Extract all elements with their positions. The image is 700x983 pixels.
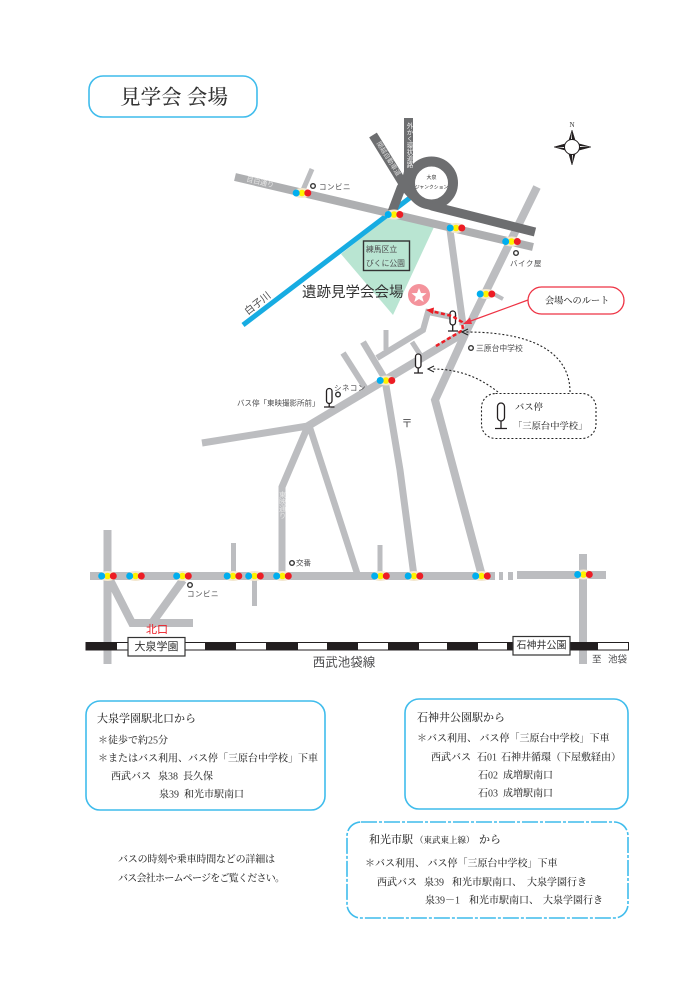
callout: route to venue: [463, 287, 624, 324]
panel: from Oizumi-gakuen station: ＊またはバス利用、バス停「三原台中学校」下車: [98, 752, 318, 764]
compass: N: [569, 121, 575, 129]
park label: びくに公園: [366, 259, 405, 268]
direction label: 池袋: [608, 654, 628, 666]
panel: from Oizumi-gakuen station: ＊徒歩で約25分: [98, 734, 168, 746]
map: river: 白子川: [242, 289, 273, 318]
railway line: [86, 642, 628, 650]
bus stops on map: [324, 311, 458, 407]
panel: from Shakujii-koen station: 石神井公園駅から: [417, 710, 505, 724]
direction label: [592, 654, 628, 666]
walking route: [426, 308, 463, 346]
panel: from Wakoshi station: ＊バス利用、 バス停「三原台中学校」下車: [365, 856, 558, 870]
landmarks: コンビニ: [319, 182, 351, 192]
panel: from Shakujii-koen station: 成増駅南口: [503, 786, 553, 800]
station: Shakujii-koen: [513, 636, 570, 655]
panel: from Wakoshi station: （東武東上線）: [415, 835, 475, 845]
note: bus schedule: [118, 852, 285, 884]
station: Shakujii-koen: 石神井公園: [516, 638, 566, 652]
railway line name: 西武池袋線: [313, 654, 376, 670]
panel: from Oizumi-gakuen station: 和光市駅南口: [184, 788, 244, 800]
panel: from Wakoshi station: 泉39－1: [425, 894, 460, 906]
panel: from Oizumi-gakuen station: 泉39: [159, 788, 179, 800]
note: bus schedule: バス会社ホームページをご覧ください。: [118, 872, 285, 884]
panel: from Oizumi-gakuen station: 泉38: [158, 770, 178, 782]
road label: Toei street: 東映通り: [278, 490, 286, 519]
landmarks: バス停「東映撮影所前」: [237, 398, 320, 408]
station: Oizumi-gakuen: 大泉学園: [134, 639, 178, 653]
landmarks: 三原台中学校: [476, 343, 523, 353]
bus stop legend: 「三原台中学校」: [513, 420, 587, 432]
park label: 練馬区立: [366, 244, 397, 254]
landmarks: 〒: [402, 418, 412, 430]
callout: route to venue: 会場へのルート: [545, 294, 609, 306]
panel: from Shakujii-koen station: 石03: [478, 788, 498, 800]
panel: from Wakoshi station: 泉39: [424, 876, 444, 888]
landmarks: シネコン: [334, 384, 366, 392]
landmarks: [187, 182, 542, 598]
panel: from Wakoshi station: から: [479, 833, 501, 846]
panel: from Shakujii-koen station: 石01: [477, 752, 497, 764]
panel: from Wakoshi station: 大泉学園行き: [543, 894, 603, 906]
compass: [554, 121, 591, 165]
panel: from Wakoshi station: 大泉学園行き: [527, 876, 587, 888]
panel: from Oizumi-gakuen station: 大泉学園駅北口から: [97, 711, 196, 725]
map: expressways and junction: [373, 118, 535, 232]
vertical road crossing rail: [108, 651, 583, 664]
bus stop legend: バス停: [515, 401, 544, 413]
panel: from Oizumi-gakuen station: 西武バス: [111, 770, 151, 782]
map: expressways and junction: 関越自動車道: [375, 140, 403, 178]
dotted arrows from bus stop legend: [428, 329, 570, 392]
panel: from Oizumi-gakuen station: 長久保: [183, 770, 213, 782]
panel: from Wakoshi station: 西武バス: [377, 876, 417, 888]
map: expressways and junction: ジャンクション: [415, 184, 448, 190]
landmarks: コンビニ: [187, 590, 219, 598]
venue label with star marker: 遺跡見学会会場: [302, 284, 404, 301]
map: expressways and junction: 大泉: [426, 174, 437, 181]
title: [89, 76, 257, 117]
traffic lights: [98, 188, 593, 581]
panel: from Shakujii-koen station: ＊バス利用、 バス停「三原台中学校」下車: [417, 732, 610, 744]
panel: from Wakoshi station: [347, 822, 628, 918]
panel: from Shakujii-koen station: 石02: [478, 770, 498, 782]
map: Mejiro street: 目白通り: [246, 174, 275, 190]
landmarks: バイク屋: [510, 259, 542, 268]
venue label with star marker: [302, 284, 430, 306]
panel: from Wakoshi station: 和光市駅南口、: [452, 876, 522, 888]
note: bus schedule: バスの時刻や乗車時間などの詳細は: [118, 852, 275, 866]
panel: from Oizumi-gakuen station: [86, 701, 325, 810]
direction label: 至: [592, 654, 602, 666]
park label: [364, 241, 410, 270]
map: river: [242, 197, 411, 325]
station: Oizumi-gakuen: [128, 638, 185, 656]
title: 見学会 会場: [120, 86, 228, 109]
panel: from Shakujii-koen station: 成増駅南口: [503, 768, 553, 782]
map: park area: [341, 215, 434, 315]
landmarks: 交番: [296, 558, 311, 568]
panel: from Wakoshi station: 和光市駅: [369, 832, 413, 846]
map: Mejiro street: [235, 174, 533, 247]
panel: from Shakujii-koen station: 西武バス: [431, 750, 471, 764]
map: local roads: [90, 169, 606, 664]
north exit label: 北口: [146, 623, 168, 636]
bus stop legend: [482, 394, 596, 438]
panel: from Shakujii-koen station: 石神井循環（下屋敷経由）: [501, 750, 621, 764]
panel: from Wakoshi station: 和光市駅南口、: [469, 894, 539, 906]
panel: from Shakujii-koen station: [405, 699, 628, 809]
map: expressways and junction: 外かく環状道路: [405, 121, 413, 169]
